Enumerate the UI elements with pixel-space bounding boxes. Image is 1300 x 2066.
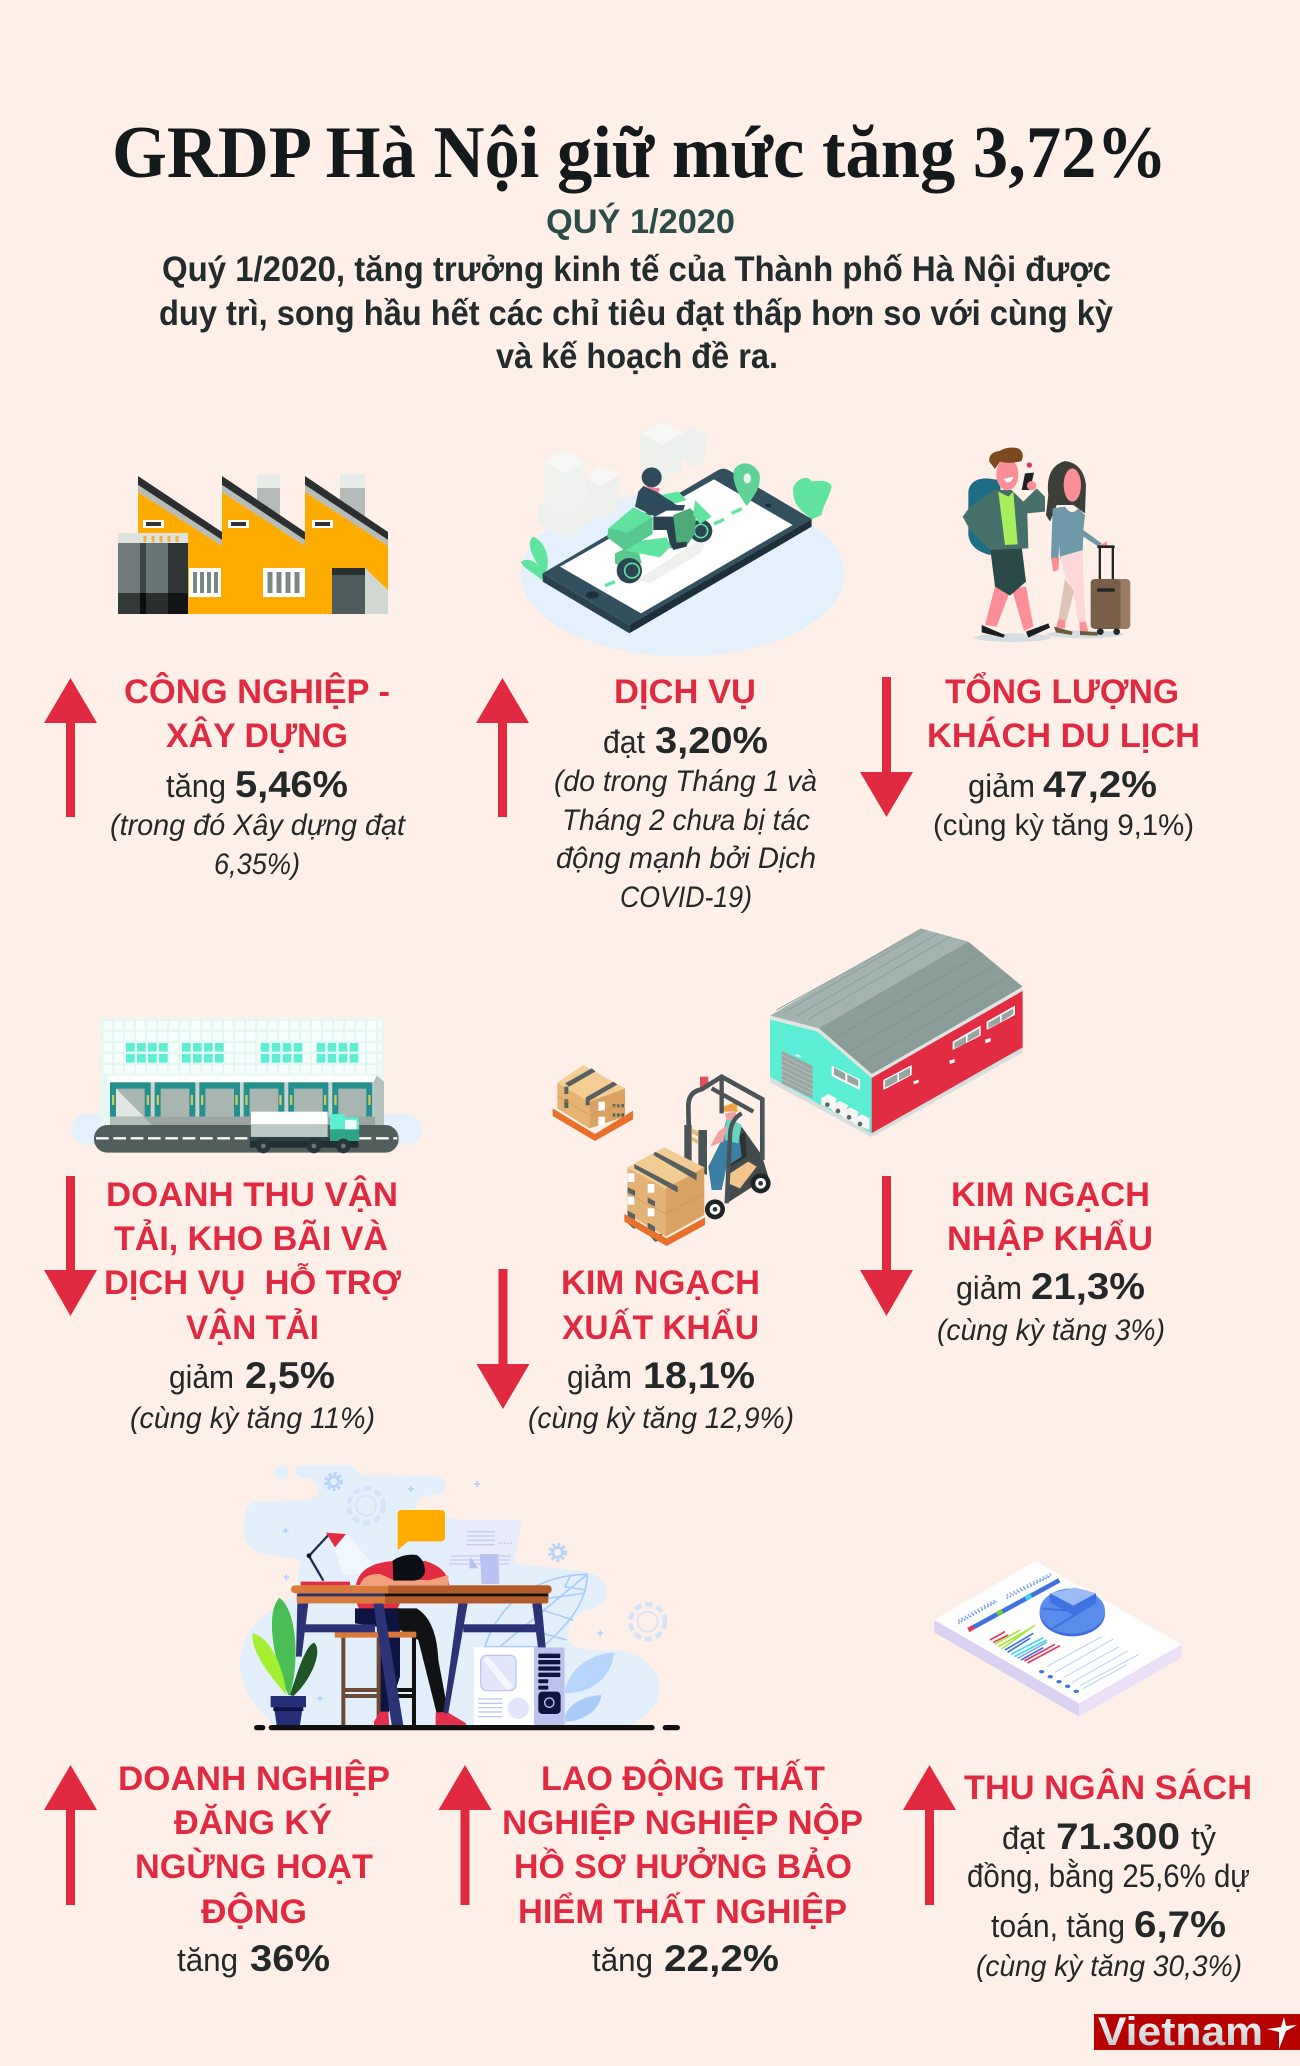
heading (502, 1759, 863, 1931)
arrow up (438, 1765, 492, 1905)
note: (trong đó Xây dựng đạt (110, 809, 407, 842)
heading: VẬN TẢI (186, 1309, 319, 1347)
value (968, 764, 1157, 805)
intro paragraph: Quý 1/2020, tăng trưởng kinh tế của Thành phố Hà Nội được (162, 250, 1111, 289)
value: 18,1% (643, 1355, 755, 1396)
value: 21,3% (1031, 1266, 1145, 1307)
value: giảm (956, 1270, 1022, 1306)
arrow up (476, 678, 529, 817)
value: tăng (592, 1942, 653, 1978)
icon: forklift with pallets (553, 1065, 771, 1246)
heading: HIỂM THẤT NGHIỆP (518, 1893, 847, 1931)
intro paragraph: và kế hoạch đề ra. (496, 337, 778, 376)
heading (124, 672, 390, 755)
intro paragraph: duy trì, song hầu hết các chỉ tiêu đạt thấp hơn so với cùng kỳ (159, 294, 1113, 333)
value: 5,46% (235, 764, 348, 805)
heading (118, 1760, 390, 1931)
value: toán, tăng (991, 1908, 1125, 1944)
note: động mạnh bởi Dịch (556, 842, 816, 875)
panel: exports (476, 1264, 794, 1435)
arrow up (44, 1765, 97, 1905)
icon: warehouse building (770, 928, 1023, 1137)
value: giảm (567, 1359, 632, 1395)
heading: NHẬP KHẨU (947, 1220, 1153, 1258)
value: tỷ (1191, 1820, 1216, 1856)
panel: businesses suspended (44, 1760, 390, 1979)
heading: CÔNG NGHIỆP - (124, 672, 390, 711)
subtitle: QUÝ 1/2020 (546, 203, 735, 241)
value: tăng (166, 768, 226, 804)
icon: travellers (963, 447, 1130, 642)
value: 2,5% (245, 1355, 335, 1396)
icon: delivery scooter on phone (521, 422, 844, 656)
panel: unemployment insurance (438, 1759, 863, 1979)
panel: tourists (860, 673, 1200, 842)
value (967, 1816, 1250, 1945)
arrow down (860, 677, 913, 817)
heading: HỒ SƠ HƯỞNG BẢO (514, 1848, 852, 1886)
icon: budget report (934, 1561, 1182, 1717)
note (554, 765, 817, 914)
note: (do trong Tháng 1 và (554, 765, 817, 798)
heading: ĐỘNG (201, 1892, 307, 1931)
heading (947, 1176, 1153, 1258)
heading: DOANH NGHIỆP (118, 1760, 390, 1798)
note: (cùng kỳ tăng 9,1%) (933, 809, 1194, 842)
value: đạt (603, 724, 645, 760)
heading: LAO ĐỘNG THẤT (541, 1759, 825, 1798)
note: (cùng kỳ tăng 3%) (937, 1314, 1165, 1347)
value: giảm (169, 1359, 234, 1395)
heading: DỊCH VỤ (614, 673, 756, 711)
note: 6,35%) (214, 848, 300, 881)
heading: NGỪNG HOẠT (135, 1848, 373, 1886)
heading: TẢI, KHO BÃI VÀ (114, 1220, 388, 1258)
value (603, 720, 768, 761)
value (177, 1938, 330, 1979)
value: 47,2% (1043, 764, 1157, 805)
value: 22,2% (664, 1938, 779, 1979)
heading (561, 1264, 760, 1347)
heading (104, 1176, 401, 1347)
value: đồng, bằng 25,6% dự (967, 1858, 1250, 1894)
heading: XÂY DỰNG (166, 717, 348, 755)
heading: DOANH THU VẬN (106, 1176, 398, 1214)
value: giảm (968, 768, 1035, 804)
title: GRDP Hà Nội giữ mức tăng 3,72% (112, 112, 1167, 194)
intro paragraph (159, 250, 1113, 376)
note: (cùng kỳ tăng 11%) (130, 1402, 375, 1435)
note: (cùng kỳ tăng 12,9%) (528, 1402, 794, 1435)
panel: services (476, 673, 817, 914)
value: 71.300 (1056, 1816, 1180, 1857)
heading: TỔNG LƯỢNG (945, 673, 1179, 711)
heading: THU NGÂN SÁCH (964, 1769, 1252, 1807)
heading: KIM NGẠCH (951, 1176, 1150, 1214)
note: (cùng kỳ tăng 30,3%) (976, 1950, 1242, 1983)
value: đạt (1002, 1820, 1045, 1856)
value: 36% (250, 1938, 330, 1979)
value: tăng (177, 1942, 238, 1978)
arrow up (44, 678, 97, 817)
value: 3,20% (655, 720, 768, 761)
icon: logistics warehouse and truck (72, 1018, 422, 1153)
heading: ĐĂNG KÝ (174, 1804, 332, 1842)
panel: imports (860, 1176, 1165, 1347)
heading: NGHIỆP NGHIỆP NỘP (502, 1803, 863, 1842)
panel: budget revenue (903, 1765, 1252, 1983)
value (166, 764, 348, 805)
heading: DỊCH VỤ HỖ TRỢ (104, 1264, 401, 1302)
note: COVID-19) (620, 881, 752, 914)
arrow down (44, 1176, 97, 1316)
value (592, 1938, 779, 1979)
note (110, 809, 407, 881)
value (567, 1355, 755, 1396)
heading (927, 673, 1200, 755)
panel: industry and construction (44, 672, 407, 881)
arrow down (860, 1176, 913, 1316)
heading: XUẤT KHẨU (562, 1309, 759, 1347)
panel: transport revenue (44, 1176, 401, 1435)
arrow down (476, 1269, 530, 1409)
note: Tháng 2 chưa bị tác (562, 804, 810, 837)
heading: KHÁCH DU LỊCH (927, 717, 1200, 755)
icon: factory (118, 474, 388, 614)
icon: tired worker at desk (240, 1465, 680, 1730)
arrow up (903, 1765, 956, 1905)
heading: KIM NGẠCH (561, 1264, 760, 1302)
value (956, 1266, 1145, 1307)
value (169, 1355, 335, 1396)
value: 6,7% (1134, 1904, 1226, 1945)
logo: Vietnam+: Vietnam (1098, 2010, 1263, 2054)
